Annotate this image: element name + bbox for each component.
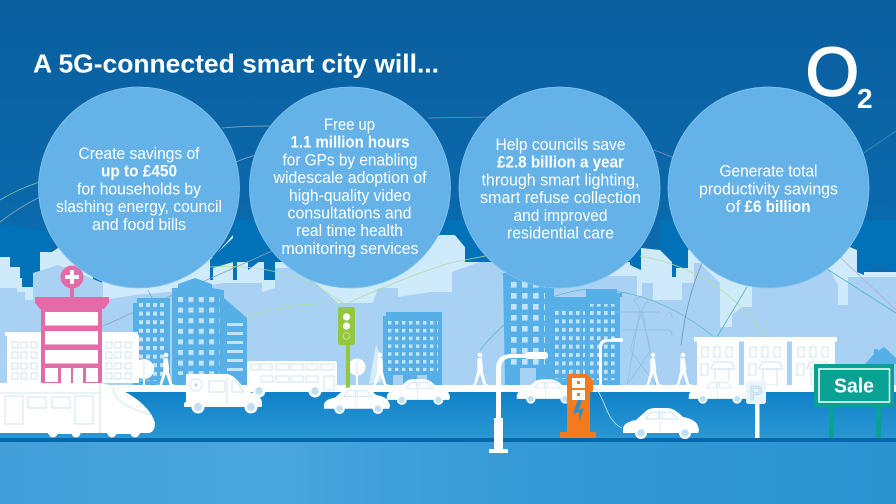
GP hours text: for GPs by enabling [282, 150, 418, 169]
productivity savings text [699, 162, 838, 216]
council savings text: Help councils save [496, 135, 626, 154]
household savings text: and food bills [92, 215, 186, 234]
GP hours text: monitoring services [282, 239, 418, 258]
shops row [694, 337, 837, 385]
O2 logo: O [806, 34, 859, 110]
GP hours text: real time health [296, 221, 403, 240]
council savings text: smart refuse collection [480, 188, 641, 207]
GP hours text: 1.1 million hours [290, 133, 410, 152]
street trees [134, 358, 366, 385]
road [0, 392, 896, 439]
network connection lines [0, 117, 896, 372]
traffic light [338, 307, 355, 389]
electricity pylon [617, 296, 672, 385]
household savings text: Create savings of [78, 144, 200, 163]
hospital [5, 266, 139, 383]
pavement strip [0, 385, 896, 392]
mid blue skyline silhouettes [0, 262, 896, 390]
parking sign: P [749, 383, 763, 405]
road kerb line [0, 438, 896, 442]
household savings text [56, 144, 222, 234]
GP hours text: widescale adoption of [273, 168, 427, 187]
productivity savings text: of [726, 197, 741, 216]
pale blue far skyline [0, 235, 896, 390]
O2 logo: 2 [857, 83, 873, 114]
productivity savings text: £6 billion [744, 197, 810, 216]
car near lane [623, 408, 699, 439]
hospital side wings [5, 332, 139, 383]
charging station [560, 374, 596, 438]
council savings text: £2.8 billion a year [497, 153, 624, 172]
council savings text: residential care [507, 224, 614, 242]
ambulance [184, 374, 262, 414]
circle: GP hours [250, 87, 450, 288]
GP hours text: Free up [324, 115, 375, 134]
council savings text: and improved [514, 206, 608, 225]
building: centre block [383, 312, 442, 385]
GP hours text: high-quality video [289, 186, 411, 205]
GP hours text [273, 115, 427, 258]
street lamp rear [599, 338, 623, 385]
ground below road [0, 442, 896, 504]
circle: productivity savings [668, 87, 869, 288]
council savings text [480, 135, 641, 242]
household savings text: slashing energy, council [56, 197, 222, 216]
street lamp front [489, 352, 548, 453]
building: tall tower [172, 278, 247, 385]
parking sign [746, 381, 766, 438]
train [0, 383, 155, 438]
circle: council savings [459, 87, 660, 288]
building: right tower [503, 273, 554, 385]
hospital pink tower [35, 266, 109, 383]
circle: household savings [38, 87, 240, 288]
cars on far lane [324, 379, 748, 414]
productivity savings text: Generate total [720, 162, 818, 181]
building: left small block [133, 298, 170, 385]
house behind sale sign [865, 347, 896, 364]
productivity savings text: productivity savings [699, 179, 838, 198]
dark blue distant skyline [0, 220, 896, 287]
sky background [0, 0, 896, 300]
building: right block [554, 289, 622, 385]
sale sign: Sale [834, 376, 874, 398]
council savings text: through smart lighting, [482, 170, 640, 189]
household savings text: for households by [77, 180, 201, 198]
GP hours text: consultations and [288, 204, 412, 222]
household savings text: up to £450 [101, 162, 177, 181]
bus [247, 361, 337, 398]
charging cable [592, 386, 622, 428]
title: A 5G-connected smart city will... [33, 48, 439, 78]
pedestrians [157, 345, 692, 386]
sale sign [814, 364, 894, 438]
